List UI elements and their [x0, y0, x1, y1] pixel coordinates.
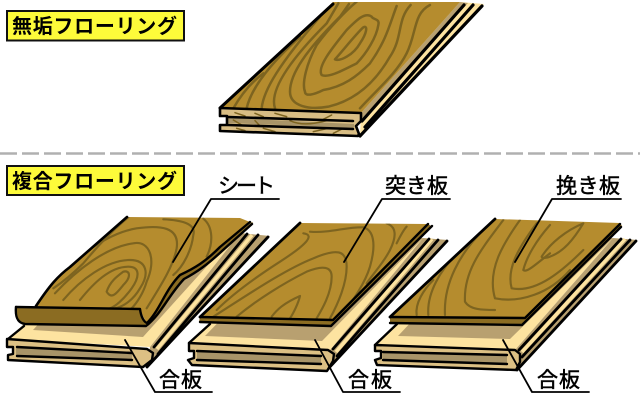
label: sheet [173, 175, 279, 262]
plywood base [375, 238, 637, 370]
veneer with grain [199, 223, 432, 326]
plywood base [7, 233, 270, 367]
label: sawn veneer: 挽き板 [556, 175, 620, 198]
label: plywood 3: 合板 [537, 369, 580, 392]
plywood base [188, 238, 448, 371]
label: plywood 3 [503, 340, 589, 392]
engineered board: sliced veneer [188, 223, 448, 371]
heading: solid wood flooring: 無垢フローリング [12, 14, 177, 38]
label: plywood 1: 合板 [159, 369, 202, 392]
divider [0, 152, 640, 155]
label: sawn veneer [515, 175, 621, 262]
heading: engineered flooring: 複合フローリング [12, 169, 177, 193]
engineered board: sawn veneer [375, 219, 637, 370]
label: sheet: シート [218, 175, 275, 198]
board top face with grain [220, 2, 460, 113]
board side [360, 2, 484, 136]
label: plywood 2 [315, 340, 400, 392]
board front end [220, 4, 361, 136]
label: plywood 2: 合板 [348, 369, 392, 392]
label: sliced veneer: 突き板 [385, 175, 448, 198]
label: sliced veneer [344, 175, 450, 262]
heading: solid wood flooring [7, 11, 184, 40]
solid wood board [220, 2, 484, 136]
engineered board: sheet type [7, 217, 270, 367]
sheet veneer [16, 217, 253, 326]
veneer with grain [390, 219, 622, 325]
label: plywood 1 [125, 340, 212, 392]
